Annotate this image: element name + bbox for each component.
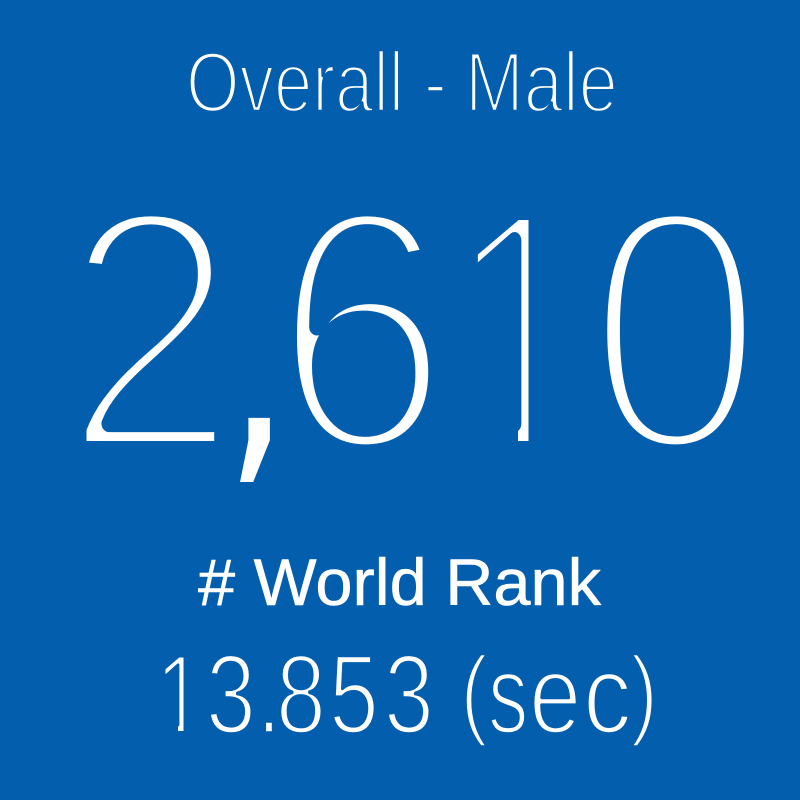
value: seconds: c [583, 633, 632, 758]
value: seconds: s [488, 632, 528, 757]
value: seconds: 5 [329, 633, 379, 757]
panel: KPI card [86, 51, 744, 746]
title: Male [465, 34, 618, 130]
value: seconds: ( [460, 635, 488, 748]
title: Overall [186, 36, 404, 130]
value: seconds: 1 [156, 633, 205, 757]
main number: , [224, 205, 290, 515]
title [186, 34, 618, 130]
subtitle: world rank: # World Rank [198, 545, 602, 619]
main number: 2 [63, 137, 238, 524]
value: seconds [166, 655, 652, 746]
title: - [424, 36, 447, 130]
value: seconds: 8 [276, 633, 326, 757]
value: seconds: ) [630, 635, 658, 748]
value: seconds: 3 [384, 633, 434, 757]
main number: 6 [273, 137, 450, 523]
value: seconds: . [256, 633, 281, 757]
main number [86, 216, 744, 482]
value: seconds: e [529, 631, 581, 757]
main number: 0 [587, 137, 764, 523]
main number: 1 [444, 136, 600, 523]
value: seconds: 3 [206, 633, 256, 757]
